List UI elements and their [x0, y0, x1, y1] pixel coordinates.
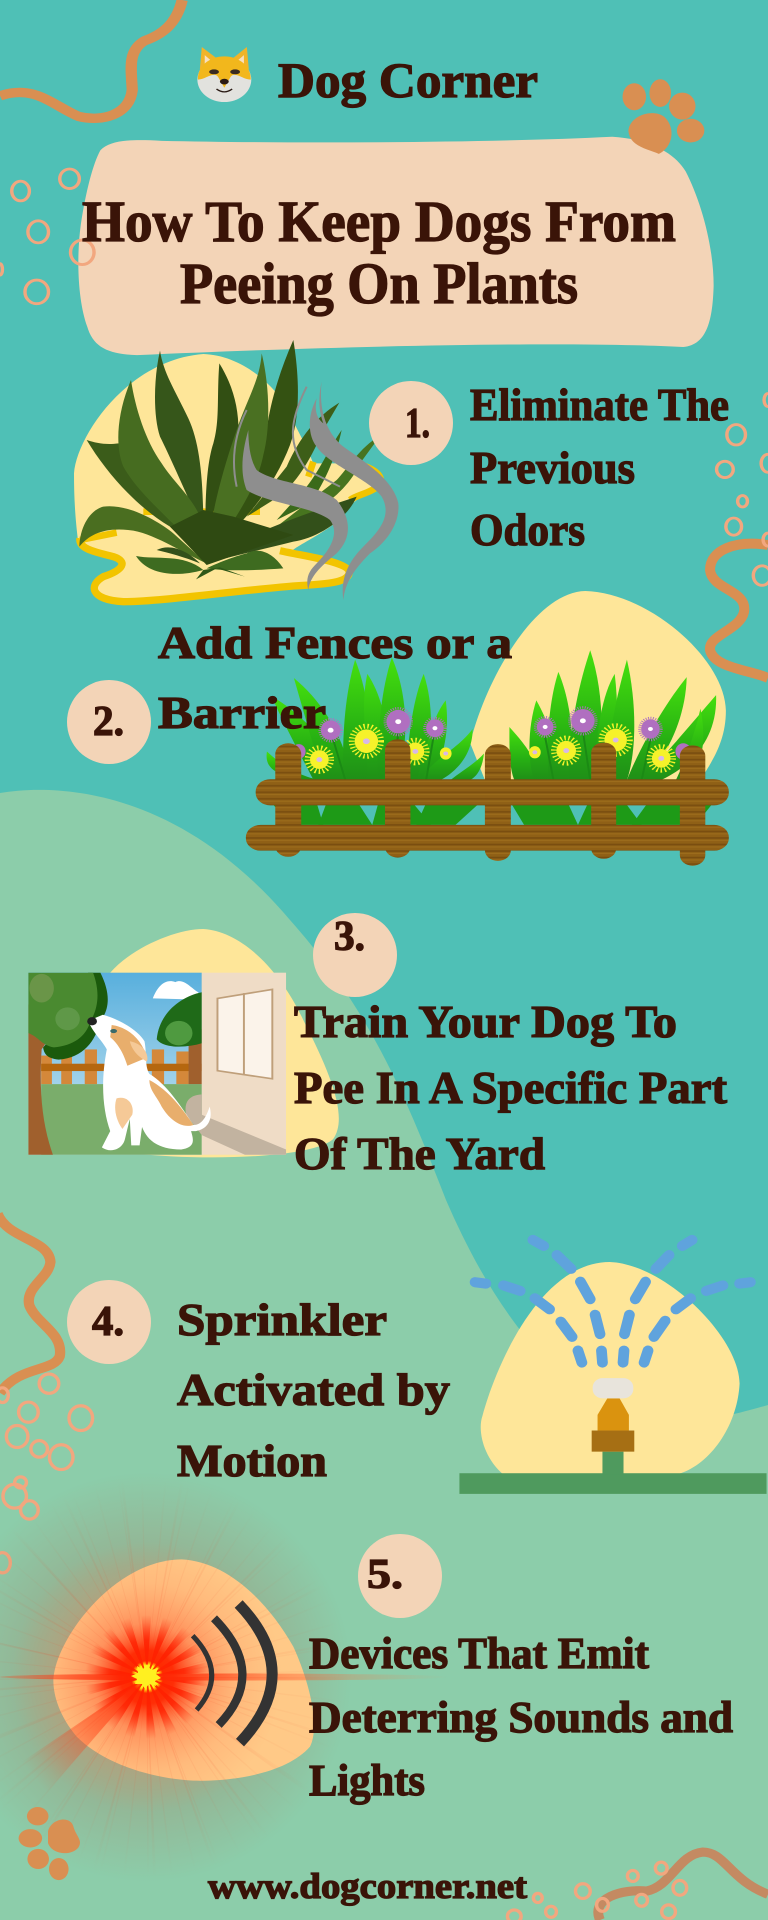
illustration: flower bed behind fence	[246, 591, 729, 866]
step 1 label: Previous	[470, 442, 635, 493]
step 5	[0, 1472, 733, 1882]
step 4 label: Sprinkler	[177, 1294, 387, 1345]
decoration: right squiggle	[710, 544, 768, 678]
brand name: Dog Corner	[278, 52, 538, 108]
icon: dog head logo	[197, 47, 251, 102]
decoration: bubble on banner edge	[71, 240, 94, 265]
step 4 label: Activated by	[177, 1364, 450, 1415]
light burst	[12, 1542, 282, 1812]
step 3 label: Pee In A Specific Part	[294, 1062, 728, 1113]
number badge 4	[67, 1280, 151, 1364]
number badge 1: 1.	[405, 401, 430, 447]
step 1 label: Odors	[470, 504, 585, 555]
step 5 label: Devices That Emit	[309, 1629, 649, 1678]
green hill background	[0, 790, 768, 1920]
number badge 3	[313, 913, 397, 997]
title line 2: Peeing On Plants	[180, 251, 578, 316]
step 3 label: Train Your Dog To	[294, 996, 677, 1047]
step 3 label	[294, 996, 728, 1179]
step 1	[74, 340, 729, 603]
illustration: motion sprinkler	[459, 1240, 767, 1494]
step 4 label: Motion	[177, 1435, 327, 1486]
light rays	[47, 1577, 247, 1777]
step 2 label: Barrier	[158, 687, 326, 738]
step 2 label	[158, 617, 512, 738]
step 3	[28, 913, 728, 1179]
number badge 2	[67, 680, 151, 764]
number badge 1	[369, 381, 453, 465]
glow halo	[0, 1472, 352, 1882]
icon: bottom paw print	[19, 1807, 80, 1880]
number badge 2: 2.	[93, 699, 124, 745]
title banner	[71, 137, 714, 355]
banner shape	[78, 137, 714, 355]
step 5 label	[309, 1629, 733, 1805]
decoration: bottom-right squiggle	[598, 1852, 768, 1920]
decoration: left squiggle	[0, 1214, 60, 1393]
step 2 label: Add Fences or a	[158, 617, 512, 668]
step 2	[67, 591, 729, 866]
step 4	[67, 1240, 767, 1494]
sound waves	[193, 1604, 272, 1743]
step 5 label: Deterring Sounds and	[309, 1693, 733, 1742]
illustration: light and sound device	[0, 1472, 450, 1882]
yellow core	[131, 1664, 161, 1689]
blob	[53, 1559, 314, 1781]
icon: top paw print	[623, 79, 704, 154]
horizontal flare	[0, 1674, 450, 1680]
spiky red edge	[116, 1646, 178, 1708]
decoration: bubbles lower left and bottom	[0, 1374, 687, 1920]
step 5 label: Lights	[309, 1756, 425, 1805]
footer website: www.dogcorner.net	[208, 1866, 527, 1906]
illustration: plant with odor	[74, 340, 399, 603]
number badge 5	[358, 1534, 442, 1618]
decoration: bubbles upper left and right	[0, 169, 768, 585]
step 3 label: Of The Yard	[294, 1128, 545, 1179]
red streak lower left	[10, 1677, 147, 1800]
step 1 label: Eliminate The	[470, 379, 729, 430]
step 1 label	[470, 379, 729, 555]
number badge 3: 3.	[334, 914, 365, 960]
step 4 label	[177, 1294, 450, 1486]
number badge 4: 4.	[92, 1299, 124, 1345]
number badge 5: 5.	[367, 1552, 403, 1598]
title line 1: How To Keep Dogs From	[82, 189, 676, 254]
decoration: top-left squiggle	[0, 0, 182, 118]
illustration: dog in yard	[28, 929, 339, 1157]
